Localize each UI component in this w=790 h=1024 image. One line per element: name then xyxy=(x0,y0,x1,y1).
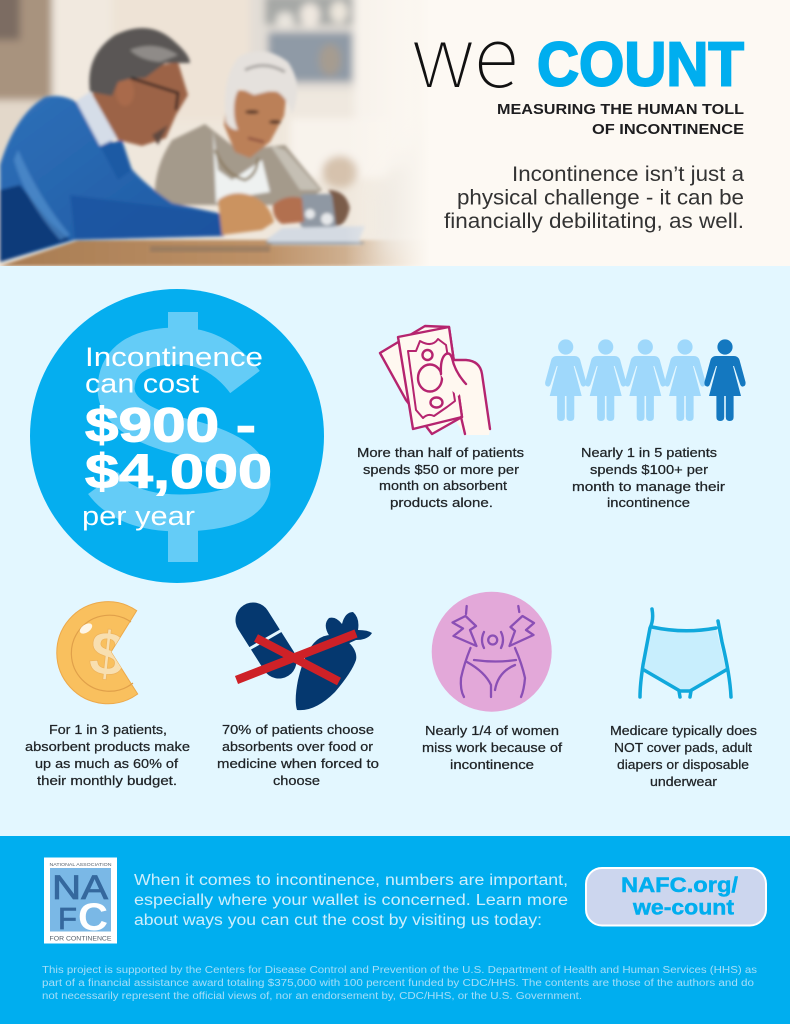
title: We Count xyxy=(412,0,744,112)
button: website link: we-count xyxy=(632,896,734,920)
title: We Count: COUNT xyxy=(537,30,744,100)
footer call to action text: about ways you can cut the cost by visiting us today: xyxy=(134,912,542,929)
icon: five women, one highlighted xyxy=(545,339,746,421)
button: website link: NAFC.org/ xyxy=(621,873,738,897)
caption: share of budget xyxy=(25,722,190,788)
woman's hand and mug xyxy=(300,194,337,228)
pill xyxy=(253,620,279,661)
logo: NAFC xyxy=(44,858,117,944)
caption: food or medicine: medicine when forced to xyxy=(217,756,379,771)
man xyxy=(0,96,224,262)
caption: share of budget: their monthly budget. xyxy=(37,773,177,788)
carrot xyxy=(296,635,356,710)
panel: footer xyxy=(0,836,790,1024)
caption: food or medicine: 70% of patients choose xyxy=(222,722,374,737)
caption: one in five patients: incontinence xyxy=(607,495,690,510)
button: website link xyxy=(586,868,766,926)
caption: share of budget: For 1 in 3 patients, xyxy=(49,722,167,737)
icon: abdominal pain xyxy=(432,592,552,712)
cost text: can cost xyxy=(85,368,200,398)
caption: food or medicine xyxy=(217,722,379,788)
caption: Medicare coverage: diapers or disposable xyxy=(617,757,749,772)
cost text: $900 - xyxy=(85,400,256,452)
footer call to action text: especially where your wallet is concerned. Learn more xyxy=(134,892,568,909)
funding disclaimer xyxy=(42,965,757,1002)
icon: coin with a slice removed: $ xyxy=(86,618,128,691)
photo: older couple reviewing bills at a table xyxy=(0,0,445,266)
icon: underwear xyxy=(640,609,731,697)
cost text: per year xyxy=(82,501,195,531)
footer call to action text: When it comes to incontinence, numbers are important, xyxy=(134,872,568,889)
blurred laptop xyxy=(382,242,394,246)
footer call to action text xyxy=(134,872,568,929)
caption: share of budget: absorbent products make xyxy=(25,739,190,754)
funding disclaimer: not necessarily represent the official views of, nor an endorsement by, CDC/HHS, or the U.S. Government. xyxy=(42,991,582,1002)
caption: food or medicine: absorbents over food or xyxy=(222,739,374,754)
woman xyxy=(155,124,322,205)
caption: food or medicine: choose xyxy=(273,773,320,788)
icon: large dollar sign xyxy=(103,312,252,562)
man's hand xyxy=(218,193,274,235)
intro text xyxy=(444,163,744,233)
icon: hand holding money xyxy=(380,326,490,435)
caption: Medicare coverage: Medicare typically does xyxy=(610,723,758,738)
logo: NAFC: C xyxy=(78,896,108,939)
icon: coin with a slice removed xyxy=(57,602,138,704)
caption: share of budget: up as much as 60% of xyxy=(35,756,178,771)
logo: NAFC: NA xyxy=(52,869,108,907)
caption: one in five patients: spends $100+ per xyxy=(590,462,709,477)
caption: missed work: incontinence xyxy=(450,757,534,772)
caption: absorbent spending: month on absorbent xyxy=(379,478,507,493)
caption: one in five patients: Nearly 1 in 5 patients xyxy=(581,445,718,460)
caption: missed work xyxy=(422,723,562,772)
icon: pill and carrot crossed out xyxy=(236,612,372,710)
logo: NAFC: NATIONAL ASSOCIATION xyxy=(50,862,112,867)
subtitle: MEASURING THE HUMAN TOLL xyxy=(497,102,744,118)
panel: statistics background xyxy=(0,266,790,836)
caption: Medicare coverage: underwear xyxy=(650,774,718,789)
intro text: physical challenge - it can be xyxy=(457,186,744,210)
subtitle xyxy=(497,102,744,138)
caption: absorbent spending: products alone. xyxy=(390,495,493,510)
header panel xyxy=(0,0,790,266)
caption: Medicare coverage: NOT cover pads, adult xyxy=(614,740,752,755)
intro text: Incontinence isn’t just a xyxy=(512,163,744,186)
logo: NAFC: F xyxy=(58,901,77,936)
caption: missed work: Nearly 1/4 of women xyxy=(425,723,559,738)
panel: annual cost circle xyxy=(30,289,324,583)
funding disclaimer: part of a financial assistance award totaling $375,000 with 100 percent funded by CDC/HHS. The contents are those of the authors and do xyxy=(42,978,754,989)
subtitle: OF INCONTINENCE xyxy=(592,122,744,138)
red cross xyxy=(236,634,356,682)
caption: Medicare coverage xyxy=(610,723,758,789)
caption: missed work: miss work because of xyxy=(422,740,562,755)
funding disclaimer: This project is supported by the Centers for Disease Control and Prevention of the U.S. Department of Health and Human Services (HHS) as xyxy=(42,965,757,976)
logo: NAFC: FOR CONTINENCE xyxy=(50,936,112,942)
caption: absorbent spending: More than half of patients xyxy=(357,445,525,460)
table xyxy=(0,240,445,266)
caption: absorbent spending xyxy=(357,445,525,510)
caption: one in five patients: month to manage their xyxy=(572,479,726,494)
cost text: Incontinence xyxy=(85,342,263,372)
intro text: financially debilitating, as well. xyxy=(444,210,744,233)
cost text xyxy=(82,342,272,531)
paperwork xyxy=(266,226,365,245)
caption: one in five patients xyxy=(572,445,726,510)
caption: absorbent spending: spends $50 or more per xyxy=(363,462,520,477)
cost text: $4,000 xyxy=(85,446,272,499)
